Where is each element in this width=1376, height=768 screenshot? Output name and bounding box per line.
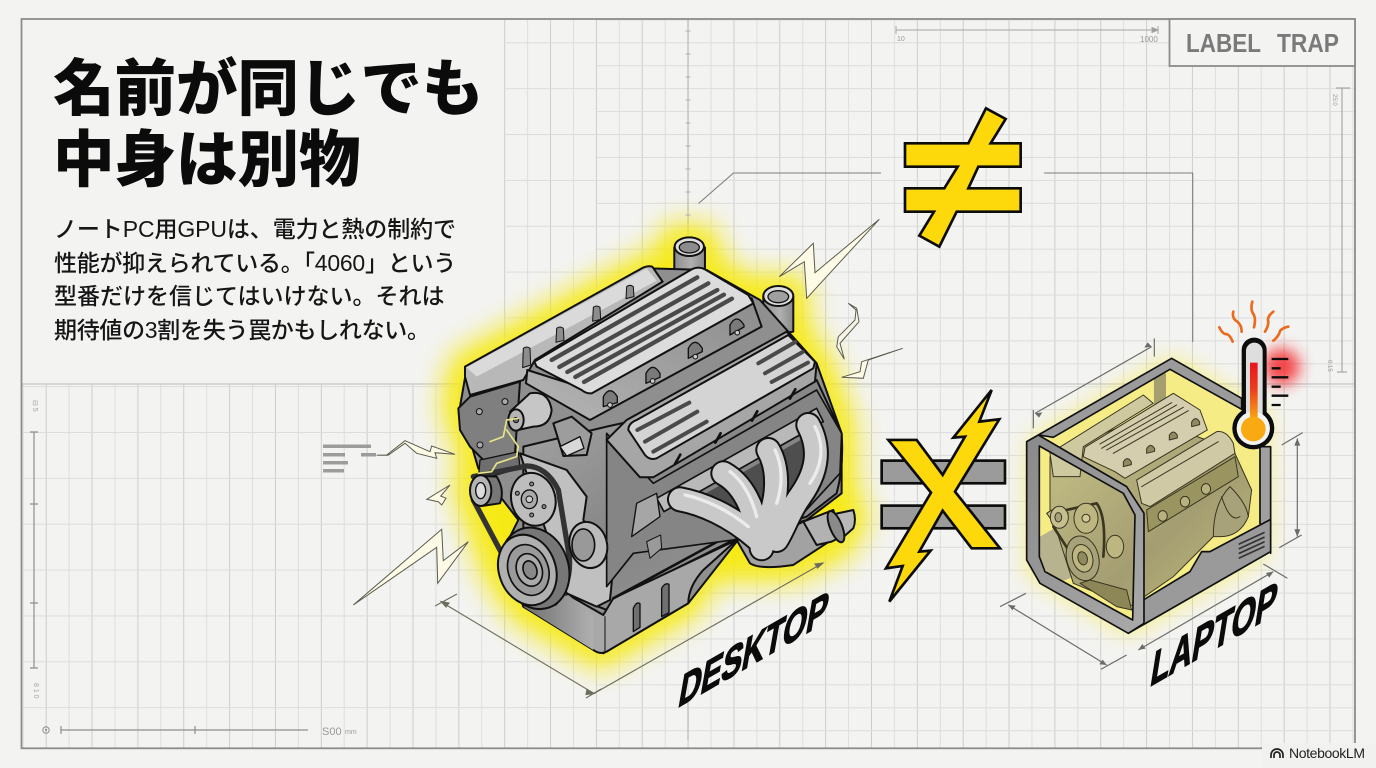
label box: LABEL TRAP: LABEL [1186, 30, 1261, 58]
broken equal icon with lightning cross [882, 390, 1005, 602]
NotebookLM watermark: NotebookLM [1289, 745, 1365, 761]
top dimension line: 1000 [1140, 35, 1158, 44]
dimension arrows: desktop [435, 563, 823, 698]
title: 名前が同じでも [53, 39, 484, 128]
rear post [1154, 373, 1166, 405]
body text: 性能が抑えられている。「4060」という [54, 250, 456, 276]
intake pipes [674, 237, 793, 337]
right dimension line: 0:15 [1326, 360, 1332, 372]
left end plate and cylinder [458, 382, 592, 480]
title: 中身は別物 [53, 110, 361, 199]
right dimension line: 25:0 [1331, 94, 1337, 106]
front valve cover [607, 332, 817, 477]
top dimension line: 10 [897, 36, 905, 43]
yellow glow: laptop [1028, 358, 1267, 633]
left vertical scale [30, 400, 39, 699]
body text [54, 216, 456, 343]
oil pan [523, 537, 737, 653]
laptop lower strut [1040, 523, 1083, 583]
body text: ノートPC用GPUは、電力と熱の制約で [54, 216, 456, 242]
thermometer [1232, 338, 1288, 449]
rear valve cover [465, 266, 663, 395]
crank pulley [488, 518, 581, 619]
laptop engine block [1047, 393, 1252, 610]
bottom horizontal scale: mm [345, 729, 357, 736]
dimension arrows: laptop [1000, 338, 1303, 669]
engine block [523, 380, 842, 610]
not equal icon [905, 108, 1021, 247]
bottom horizontal scale [43, 726, 357, 738]
electric spark [478, 418, 518, 473]
body text: 期待値の3割を失う罠かもしれない。 [54, 317, 430, 343]
left vertical scale: 8 1 0 [32, 683, 39, 699]
front timing cover [520, 453, 613, 607]
body text: 型番だけを信じてはいけない。それは [54, 283, 445, 309]
dark manifold background [607, 390, 842, 587]
NotebookLM watermark [1262, 743, 1376, 768]
water pump pulley [505, 468, 561, 531]
laptop illustration [1027, 302, 1300, 633]
small text bars [323, 444, 376, 472]
exhaust manifold [680, 425, 855, 567]
cage right post [1260, 447, 1271, 553]
belt [473, 466, 570, 603]
yellow glow: desktop engine [457, 240, 853, 653]
lightning sketches around desktop engine [353, 219, 903, 605]
heat waves [1219, 302, 1288, 342]
right dimension line [1326, 88, 1350, 372]
heat glow [1263, 348, 1300, 385]
desktop label: DESKTOP [675, 580, 833, 718]
label box: LABEL TRAP [1170, 19, 1355, 66]
center valve cover [526, 268, 762, 420]
tick marks on vertical axis [686, 31, 690, 215]
engine base silhouette [460, 268, 842, 653]
leader line: upper left [698, 173, 881, 204]
cage bottom panel [1128, 519, 1271, 633]
desktop engine illustration [458, 237, 855, 653]
round cover [564, 518, 612, 572]
idler pulley [470, 475, 502, 506]
bottom horizontal scale: S00 [322, 726, 342, 738]
leader line: upper right [1044, 173, 1193, 342]
cage front frame [1027, 435, 1144, 633]
title [53, 39, 484, 199]
cage interior [1040, 368, 1263, 623]
left vertical scale: ⊟ 5 [31, 400, 38, 412]
cage top bars [1038, 358, 1242, 437]
laptop label: LAPTOP [1147, 570, 1281, 698]
top dimension line [896, 26, 1158, 44]
label box: LABEL TRAP: TRAP [1277, 30, 1339, 58]
